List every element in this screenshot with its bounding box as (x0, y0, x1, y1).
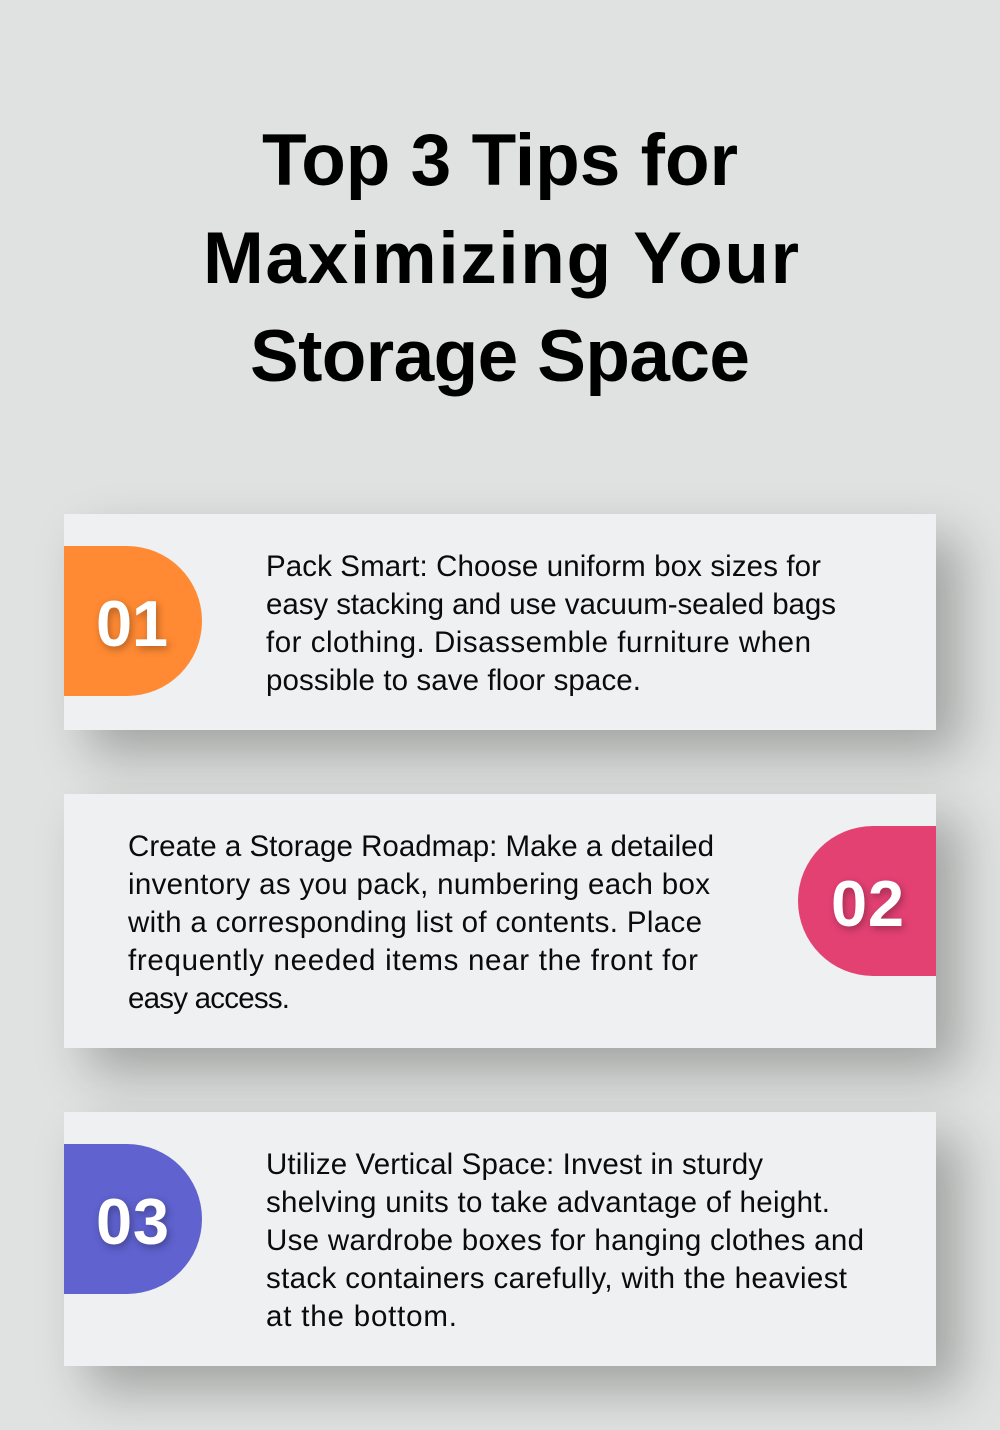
badge: 01 (64, 546, 202, 696)
text: storage roadmap: with a corresponding list of contents. Place (127, 906, 702, 939)
text: storage roadmap: easy access. (128, 982, 290, 1015)
text: storage roadmap: inventory as you pack, numbering each box (128, 868, 710, 901)
title: Storage Space (250, 316, 750, 397)
text: storage roadmap: Create a Storage Roadmap: Make a detailed (128, 830, 714, 863)
text: vertical space: Utilize Vertical Space: Invest in sturdy (266, 1148, 763, 1181)
number 01: 01 (96, 587, 168, 660)
text: storage roadmap (127, 830, 714, 1015)
text: pack smart: possible to save floor space. (266, 664, 641, 697)
text: pack smart: for clothing. Disassemble furniture when (266, 626, 811, 659)
text: pack smart: easy stacking and use vacuum-sealed bags (266, 588, 836, 621)
title (203, 120, 799, 397)
text: pack smart (266, 550, 836, 697)
title: Maximizing Your (203, 218, 799, 299)
text: vertical space: at the bottom. (266, 1300, 457, 1333)
panel: tip 2 storage roadmap (64, 794, 936, 1048)
text: vertical space: stack containers carefully, with the heaviest (266, 1262, 847, 1295)
text: vertical space (266, 1148, 864, 1333)
text: vertical space: shelving units to take advantage of height. (266, 1186, 830, 1219)
text: pack smart: Pack Smart: Choose uniform box sizes for (266, 550, 821, 583)
title: Top 3 Tips for (262, 120, 738, 201)
text: vertical space: Use wardrobe boxes for hanging clothes and (266, 1224, 864, 1257)
text: storage roadmap: frequently needed items near the front for (128, 944, 698, 977)
panel: tip 3 vertical space (64, 1112, 936, 1366)
number 02: 02 (831, 867, 904, 940)
badge: 03 (64, 1144, 202, 1294)
number 03: 03 (96, 1185, 169, 1258)
panel: tip 1 pack smart (64, 514, 936, 730)
badge: 02 (798, 826, 936, 976)
